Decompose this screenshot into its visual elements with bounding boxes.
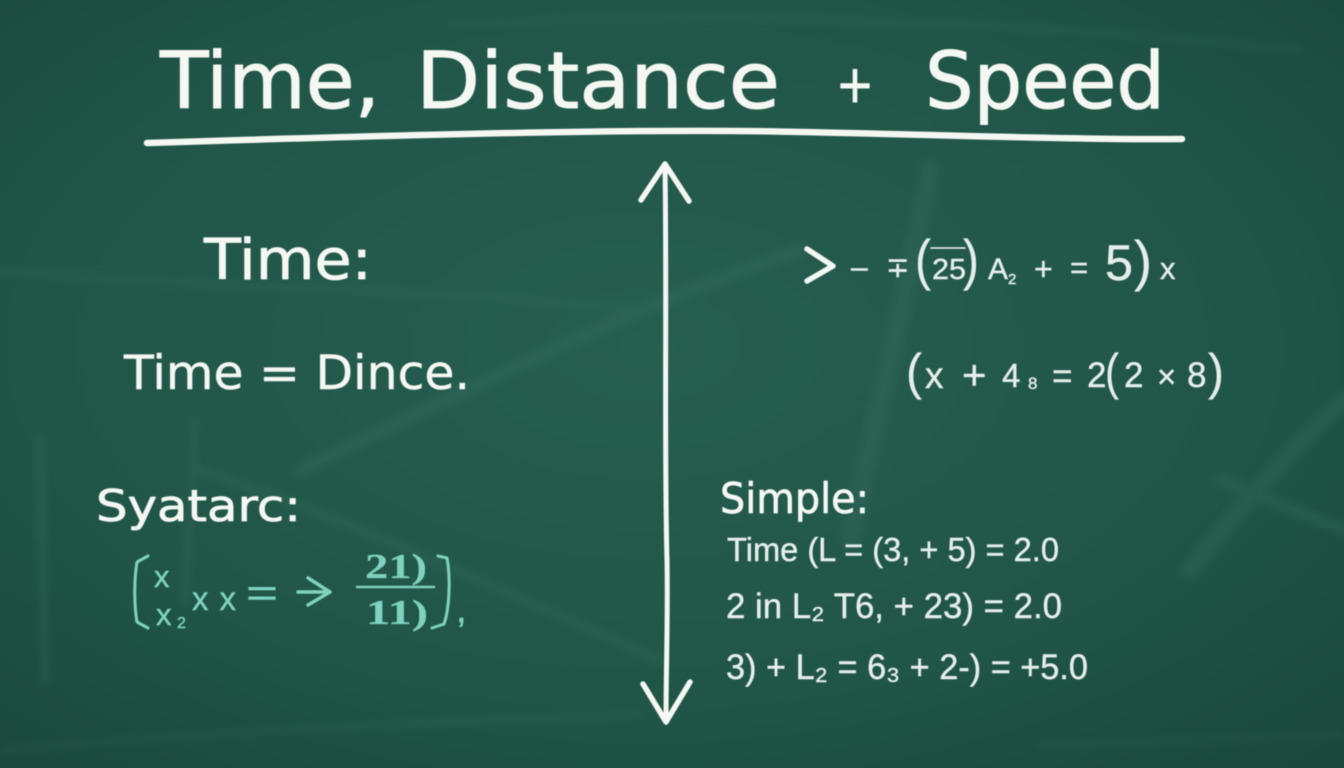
right panel: first equation: – bbox=[851, 251, 868, 284]
right panel: second equation: ( bbox=[1105, 344, 1119, 400]
left panel: teal matrix formula: xx bbox=[192, 580, 236, 617]
right panel: first equation: A bbox=[988, 253, 1008, 286]
right panel: second equation: 2 bbox=[1087, 356, 1106, 395]
right panel: worked example lines: Time (L = (3, + 5) = 2.0 bbox=[727, 531, 1059, 568]
right panel: second equation: + bbox=[962, 351, 987, 398]
right panel: first equation: + bbox=[1034, 251, 1053, 287]
right panel: second equation: x bbox=[925, 355, 944, 396]
right panel: second equation: = bbox=[1052, 357, 1072, 396]
right panel: first equation: ) bbox=[1134, 229, 1152, 292]
right panel: second equation: 8 bbox=[1028, 374, 1037, 393]
left panel: teal matrix formula: , bbox=[456, 589, 467, 631]
right panel: first equation: x bbox=[1160, 251, 1176, 286]
double-headed vertical arrow bbox=[641, 164, 690, 722]
title underline bbox=[147, 131, 1182, 143]
right panel: first equation: 25 bbox=[932, 254, 966, 286]
right panel: first equation: = bbox=[1070, 250, 1088, 285]
right panel: second equation: ) bbox=[1208, 344, 1224, 400]
left panel: teal matrix formula bbox=[135, 547, 467, 632]
right panel: first equation: ) bbox=[963, 228, 979, 291]
left panel: teal matrix formula: 2 bbox=[177, 615, 186, 632]
title: Time, bbox=[159, 37, 380, 127]
left panel: teal matrix formula: 11) bbox=[366, 593, 428, 632]
title bbox=[159, 37, 1165, 127]
title: + bbox=[836, 55, 874, 115]
right panel: second equation: 4 bbox=[1002, 357, 1020, 394]
right panel: first equation: 2 bbox=[1008, 271, 1016, 288]
title: Speed bbox=[925, 37, 1165, 127]
right panel: worked example lines: 3) + L₂ = 6₃ + 2-) = +5.0 bbox=[726, 648, 1088, 687]
left panel: time heading: Time: bbox=[203, 228, 372, 293]
right panel: simple heading: Simple: bbox=[720, 474, 869, 523]
right panel: first equation: ∓ bbox=[886, 252, 909, 283]
right panel: second equation: × bbox=[1157, 358, 1176, 395]
right panel: first equation: ( bbox=[915, 228, 931, 291]
right panel: second equation: 8 bbox=[1187, 356, 1206, 395]
left panel: teal matrix formula: 21) bbox=[365, 547, 427, 586]
left panel: syntax heading: Syatarc: bbox=[96, 481, 301, 532]
right panel: worked example lines: 2 in L₂ T6, + 23) = 2.0 bbox=[726, 587, 1062, 626]
left panel: teal matrix formula: x bbox=[156, 597, 172, 632]
left panel: time formula: Time = Dince. bbox=[123, 346, 470, 401]
left panel: teal matrix formula: x bbox=[154, 559, 170, 594]
right panel: second equation: ( bbox=[906, 344, 922, 400]
right panel: second equation bbox=[906, 344, 1224, 400]
right panel: second equation: 2 bbox=[1124, 356, 1143, 395]
right panel: first equation bbox=[807, 228, 1176, 292]
right panel: first equation: 5 bbox=[1105, 235, 1133, 291]
title: Distance bbox=[416, 37, 780, 127]
right panel: worked example lines bbox=[726, 531, 1088, 687]
left panel: teal matrix formula: = bbox=[246, 573, 278, 615]
